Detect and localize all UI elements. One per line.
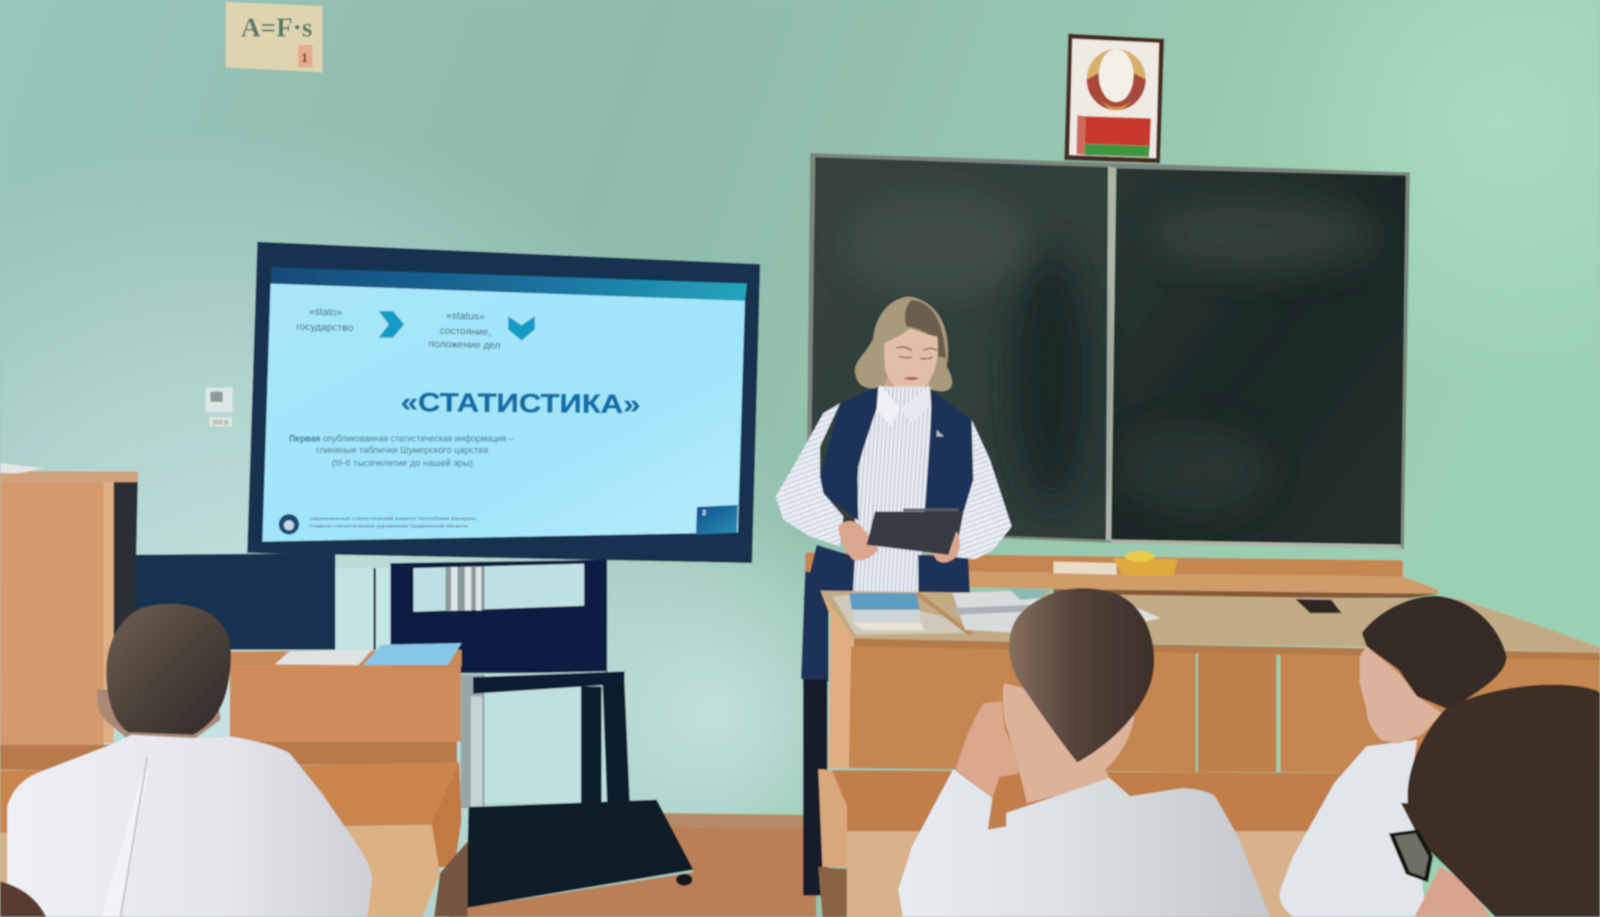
student center [898,588,1270,917]
glasses [1392,831,1431,880]
slide body text [289,434,514,468]
back-left desk with papers [230,643,462,765]
poster: formula: A=F·s [241,12,313,43]
wall device [205,388,233,426]
hair [1362,596,1507,710]
face [884,328,938,393]
student far right [1392,685,1600,917]
seated students [898,588,1600,917]
slide text: origin of the word [296,307,501,352]
front-right desk [818,769,1357,917]
slide text: origin of the word: состояние, [440,326,491,338]
interactive display [247,242,760,563]
slide background [262,284,745,542]
slide footer text: Национальный статистический комитет Республики Беларусь [309,515,477,521]
slide body text: глиняные таблички Шумерского царства [316,445,489,455]
ear [1415,866,1490,917]
slide footer text [309,515,477,528]
sleeves [776,403,843,546]
teacher [776,297,1012,600]
neck and ear [97,690,221,740]
slide text: origin of the word: государство [296,322,354,334]
stand legs and base [461,671,693,908]
striped shirt [853,387,932,593]
slide logo [279,514,299,534]
hair [1009,588,1154,762]
slide title: «СТАТИСТИКА» [401,387,641,419]
slide number box: 2 [702,509,706,517]
student left [0,604,372,917]
hair [106,604,231,735]
slide text: origin of the word: «stato» [309,307,343,319]
rear shelf with items [805,551,1438,598]
left classroom furniture and monitor stand [0,463,693,917]
pin [937,430,944,437]
hand [956,701,1018,798]
slide body text: Первая опубликованная статистическая информация – [289,434,514,444]
neck and ear [1003,683,1135,803]
poster: formula: 1 [301,50,308,65]
shirt [898,769,1270,917]
neck [882,377,930,405]
clipboard [867,511,963,555]
stand and panel behind monitor [133,553,607,673]
student right [1280,596,1507,917]
slide body text: (III-II тысячелетие до нашей эры) [332,458,473,468]
poster: formula [226,2,323,72]
shirt [7,735,372,917]
chalkboard [806,153,1410,549]
teacher desk [820,591,1600,775]
hair [1401,685,1600,917]
teacher lower body [801,571,829,896]
framed state emblem and flag [1064,34,1164,163]
hair [855,297,952,391]
wall device: 200 В [212,419,228,426]
shirt [1280,740,1426,917]
cabinet [0,463,138,770]
front-left desk [0,762,468,917]
books on desk [833,588,1342,635]
monitor bezel [247,242,760,563]
floor [449,813,816,917]
vest [803,387,973,600]
slide number box [696,505,738,534]
face [1360,646,1442,744]
slide footer text: Главное статистическое управление Гродненской области [309,522,468,528]
slide text: origin of the word: «status» [446,311,485,323]
slide text: origin of the word: положение дел [428,339,501,352]
chevrons [379,311,535,341]
slide header band [271,267,747,302]
hands [838,521,878,560]
